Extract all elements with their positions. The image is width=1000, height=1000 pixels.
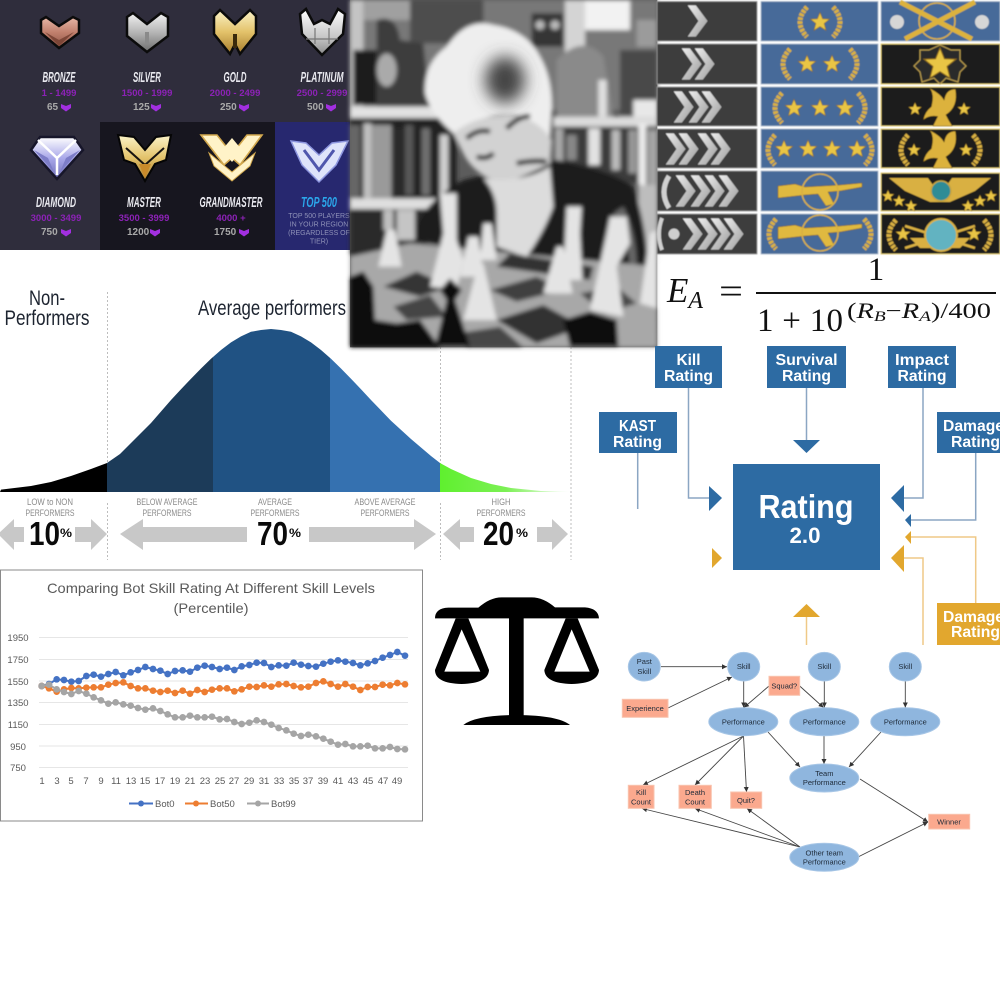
gridlines	[39, 638, 408, 768]
node labels: Experience	[626, 704, 664, 713]
node labels: Performance	[884, 718, 927, 726]
chart legend: Bot99	[271, 799, 296, 810]
bell curve	[0, 320, 572, 495]
fraction bar	[756, 292, 996, 294]
skill rating ranges: 2000 - 2499	[210, 88, 260, 99]
x axis labels: 3	[54, 776, 60, 787]
top 500 note: (REGARDLESS OF	[288, 230, 350, 237]
category labels: BELOW AVERAGE	[136, 497, 198, 507]
icon: diamond	[31, 137, 83, 179]
box: survival rating	[767, 346, 846, 388]
bookshelves	[350, 107, 657, 262]
point gems	[61, 104, 336, 236]
category labels: ABOVE AVERAGE	[354, 497, 416, 507]
x axis labels: 29	[244, 776, 254, 787]
blue arrowheads	[709, 440, 911, 527]
x axis labels: 25	[215, 776, 225, 787]
chart legend: Bot0	[155, 799, 175, 810]
node labels: Past	[637, 657, 653, 666]
chart title: Comparing Bot Skill Rating At Different Skill Levels	[47, 580, 375, 596]
orange nodes	[622, 676, 970, 829]
x axis labels: 7	[83, 776, 89, 787]
heading: non-performers line 2: Performers	[4, 307, 90, 330]
x axis labels: 11	[111, 776, 121, 787]
node labels: Skill	[898, 662, 913, 671]
x axis labels: 5	[68, 776, 74, 787]
node labels: Count	[685, 798, 706, 806]
node labels: Count	[631, 798, 652, 806]
box: kast rating: KAST	[619, 418, 656, 435]
box: kill rating: Kill	[676, 352, 700, 369]
x axis labels: 45	[363, 776, 373, 787]
network arrows	[642, 667, 928, 857]
denominator: 1 + 10	[757, 303, 843, 339]
node labels: Winner	[937, 818, 961, 826]
icon: balance scale	[435, 597, 599, 725]
percentages: %	[60, 526, 72, 540]
point costs: 1750	[214, 227, 237, 238]
series: bot0	[42, 652, 405, 686]
point costs: 750	[41, 227, 58, 238]
exponent: −	[886, 298, 902, 323]
box: kill rating: Rating	[664, 368, 713, 385]
box: survival rating: Survival	[776, 352, 838, 369]
face	[453, 115, 552, 183]
point costs: 125	[133, 102, 150, 113]
x axis labels: 35	[289, 776, 299, 787]
chart title: (Percentile)	[174, 600, 248, 616]
black pieces	[350, 272, 618, 347]
icon: master	[118, 135, 171, 181]
x axis labels: 47	[378, 776, 388, 787]
x axis labels: 37	[303, 776, 313, 787]
panel: chess player photo	[350, 0, 657, 347]
category labels: PERFORMERS	[476, 508, 526, 518]
panel: rating 2.0 diagram	[599, 346, 1000, 645]
equals sign: =	[719, 271, 743, 311]
percentages: %	[289, 526, 301, 540]
x axis labels: 23	[200, 776, 210, 787]
heading: average performers: Average performers	[198, 297, 346, 320]
panel: bayesian skill network	[622, 652, 970, 871]
data series	[42, 652, 405, 749]
x axis labels: 21	[185, 776, 195, 787]
x axis labels: 39	[318, 776, 328, 787]
node labels: Performance	[803, 858, 846, 866]
box: kast rating	[599, 412, 677, 453]
node labels: Performance	[803, 718, 846, 726]
y axis labels: 1750	[7, 655, 29, 666]
shaded hair	[485, 57, 525, 103]
dotted guides	[108, 292, 571, 560]
tier names	[36, 69, 344, 211]
gold stars and wreaths	[768, 7, 872, 251]
category labels: PERFORMERS	[26, 508, 74, 518]
top 500 note: TIER)	[310, 238, 328, 246]
box: rating 2.0	[733, 464, 880, 570]
panel: counter-strike rank badges	[657, 2, 1000, 254]
numerator: 1	[868, 252, 884, 288]
jacket	[417, 160, 648, 270]
x axis labels: 49	[392, 776, 402, 787]
skill rating ranges: 2500 - 2999	[297, 88, 347, 99]
blue nodes	[628, 652, 940, 871]
elite emblems	[882, 2, 997, 251]
box: kast rating: Rating	[613, 434, 662, 451]
y axis labels: 1950	[7, 633, 29, 644]
icon: top 500	[291, 141, 348, 182]
tier names: MASTER	[127, 194, 161, 211]
x axis labels: 31	[259, 776, 269, 787]
chessboard	[350, 243, 657, 347]
line chart: bot skill rating	[0, 570, 422, 821]
point costs: 250	[220, 102, 237, 113]
x axis labels: 9	[98, 776, 104, 787]
category labels: PERFORMERS	[250, 508, 300, 518]
point costs: 1200	[127, 227, 150, 238]
x axis labels: 19	[170, 776, 180, 787]
x axis labels: 41	[333, 776, 343, 787]
tier names: BRONZE	[42, 69, 76, 86]
node labels: Squad?	[771, 682, 797, 690]
node labels: Skill	[817, 662, 832, 671]
skill rating ranges: 3500 - 3999	[119, 213, 169, 224]
node labels: Other team	[806, 848, 843, 858]
y axis labels: 1350	[7, 698, 29, 709]
silver chevrons	[659, 5, 744, 250]
exponent: B	[874, 309, 886, 325]
heading: non-performers: Non-	[29, 287, 65, 310]
hand	[483, 167, 553, 257]
skill rating ranges: 1500 - 1999	[122, 88, 172, 99]
skill rating ranges	[31, 88, 347, 224]
panel: competitive tiers	[0, 0, 350, 250]
chart legend: Bot50	[210, 799, 235, 810]
exponent: R	[900, 298, 920, 323]
series: bot50	[42, 681, 405, 694]
icon: gold	[214, 10, 256, 54]
node labels: Skill	[637, 667, 652, 676]
left side: A	[686, 288, 703, 314]
category labels: LOW to NON	[27, 497, 73, 507]
y axis labels	[7, 633, 29, 774]
category labels	[26, 497, 526, 518]
y axis labels: 750	[10, 763, 26, 774]
top 500 note	[288, 213, 350, 246]
white pieces	[378, 193, 657, 320]
point costs: 500	[307, 102, 324, 113]
node labels: Performance	[722, 718, 765, 726]
x axis labels: 33	[274, 776, 284, 787]
box: impact rating	[888, 346, 956, 388]
tier names: SILVER	[133, 69, 161, 86]
chart legend	[129, 799, 296, 810]
percentages: %	[516, 526, 528, 540]
node labels: Team	[815, 769, 833, 778]
category labels: AVERAGE	[258, 497, 292, 507]
point costs	[41, 102, 324, 238]
eyes and mouth	[467, 116, 547, 163]
x axis labels: 17	[155, 776, 165, 787]
exponent: )/400	[931, 298, 991, 323]
orange arrowheads	[712, 531, 911, 617]
skill rating ranges: 1 - 1499	[42, 88, 76, 99]
tier names: DIAMOND	[36, 194, 76, 211]
x axis labels	[39, 776, 402, 787]
box: damage rating orange: Rating	[951, 624, 1000, 641]
category labels: PERFORMERS	[360, 508, 410, 518]
icon: silver	[127, 13, 168, 52]
point costs: 65	[47, 102, 59, 113]
box: survival rating: Rating	[782, 368, 831, 385]
x axis labels: 43	[348, 776, 358, 787]
y axis labels: 1550	[7, 677, 29, 688]
category labels: PERFORMERS	[142, 508, 192, 518]
box: rating 2.0: Rating	[758, 488, 854, 525]
x axis labels: 27	[229, 776, 239, 787]
range arrows	[0, 519, 568, 550]
box: damage rating: Rating	[951, 434, 1000, 451]
y axis labels: 1150	[8, 720, 28, 731]
node labels: Quit?	[737, 796, 755, 805]
node labels: Skill	[737, 662, 751, 671]
box: damage rating	[937, 412, 1000, 453]
box: impact rating: Impact	[895, 352, 950, 369]
top 500 note: TOP 500 PLAYERS	[288, 213, 350, 220]
tier names: TOP 500	[301, 194, 337, 211]
jacket highlights	[613, 207, 637, 267]
icon: platinum	[300, 9, 345, 55]
skill rating ranges: 3000 - 3499	[31, 213, 81, 224]
percentages: 20	[483, 515, 514, 552]
elo formula	[666, 252, 996, 339]
x axis labels: 15	[140, 776, 150, 787]
node labels: Death	[685, 788, 705, 797]
box: impact rating: Rating	[898, 368, 946, 385]
top 500 note: IN YOUR REGION	[290, 222, 348, 228]
percentages: 10	[29, 515, 60, 552]
exponent: A	[918, 309, 932, 325]
percentages	[29, 515, 528, 552]
y axis labels: 950	[10, 742, 26, 753]
series: bot99	[42, 685, 405, 749]
left side: E	[667, 271, 688, 310]
box: damage rating orange	[937, 603, 1000, 645]
icon: bronze	[41, 17, 79, 48]
connector lines	[638, 388, 976, 645]
badge backgrounds	[657, 2, 1000, 254]
node labels	[626, 657, 961, 866]
x axis labels: 1	[39, 776, 45, 787]
category labels: HIGH	[492, 497, 510, 507]
x axis labels: 13	[126, 776, 136, 787]
chart title	[47, 580, 375, 616]
hair	[425, 23, 552, 140]
node labels: Performance	[803, 778, 846, 787]
exponent: (R	[847, 298, 870, 323]
wall and trophies	[350, 0, 657, 120]
tier names: GOLD	[224, 69, 247, 86]
box: kill rating	[655, 346, 722, 388]
skill rating ranges: 4000 +	[216, 213, 246, 224]
tier names: PLATINUM	[300, 69, 344, 86]
icon: grandmaster	[201, 135, 262, 181]
panel: normal distribution of performers	[0, 287, 572, 560]
box: rating 2.0: 2.0	[790, 523, 820, 548]
percentages: 70	[257, 515, 288, 552]
tier names: GRANDMASTER	[200, 194, 263, 211]
node labels: Kill	[636, 788, 646, 797]
